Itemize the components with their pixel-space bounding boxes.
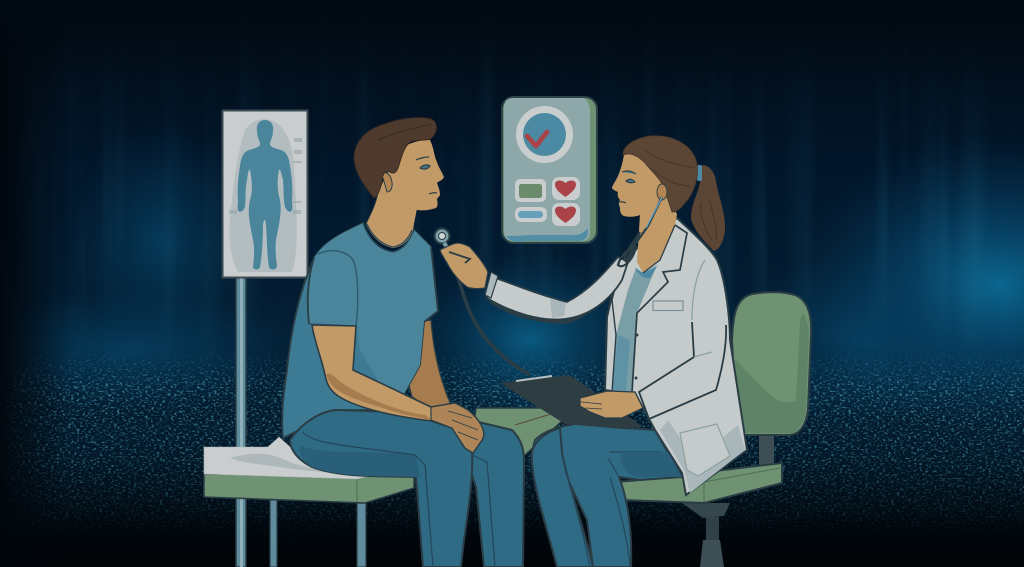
cuff	[485, 272, 498, 298]
hair	[623, 136, 697, 212]
status dial with check mark	[516, 106, 573, 163]
torso and shirt	[282, 223, 438, 438]
face	[612, 153, 664, 217]
patient	[282, 118, 524, 567]
far leg	[460, 420, 524, 567]
wall monitor	[502, 97, 597, 243]
chair seat	[615, 463, 782, 503]
poster: body chart	[222, 110, 308, 278]
readout tiles and hearts	[515, 177, 580, 226]
table front and top	[204, 474, 414, 503]
neck	[366, 192, 417, 248]
lower arm sleeve	[639, 320, 726, 419]
scrub top	[612, 265, 657, 392]
stethoscope chest piece and tube	[434, 228, 530, 375]
chair back	[732, 292, 811, 435]
eye and brow	[416, 157, 437, 194]
lab coat body	[605, 218, 747, 495]
table legs	[270, 500, 366, 567]
hand on clipboard	[580, 391, 643, 418]
exam table	[204, 408, 563, 567]
near leg and thigh	[290, 410, 472, 567]
far section of table	[470, 408, 563, 455]
ear	[381, 172, 392, 192]
hand	[431, 403, 484, 453]
badge	[653, 301, 683, 310]
pocket	[680, 424, 730, 476]
ponytail	[691, 165, 725, 251]
paper sheet	[204, 437, 377, 479]
coat shading	[660, 420, 745, 493]
lapels	[632, 225, 687, 392]
doctor	[485, 136, 747, 567]
doctor legs	[532, 423, 682, 567]
human silhouette	[238, 120, 292, 270]
hair	[354, 118, 436, 198]
chair stem and base	[682, 433, 774, 567]
ear	[657, 184, 667, 200]
poster stand pole	[236, 278, 246, 567]
clipboard	[500, 375, 643, 428]
doctor's hand holding stethoscope	[440, 243, 488, 289]
face	[378, 140, 444, 210]
neck	[637, 195, 677, 273]
far arm	[405, 320, 451, 410]
office chair	[615, 292, 811, 567]
outstretched arm sleeve	[487, 257, 628, 320]
stethoscope neck loop	[618, 197, 662, 266]
near arm	[312, 325, 484, 453]
eye and brow	[618, 171, 636, 203]
far section of stethoscope tube	[490, 235, 640, 322]
